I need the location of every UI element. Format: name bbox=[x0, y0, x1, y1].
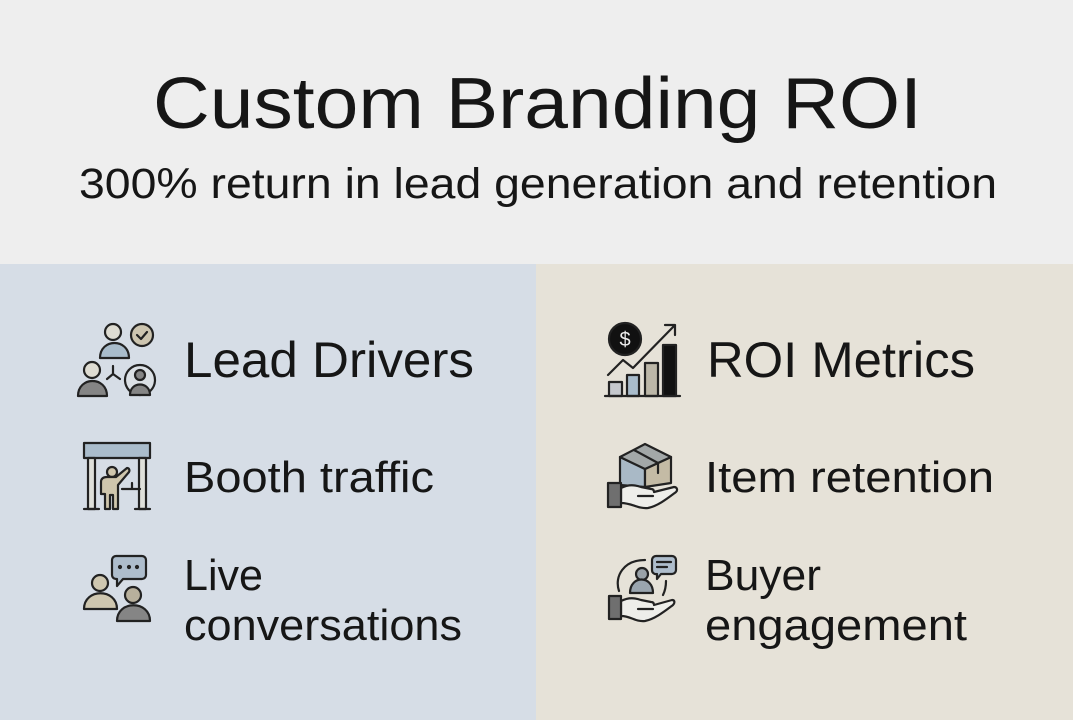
label: buyer engagement: Buyer bbox=[705, 551, 821, 600]
panel: lead drivers bbox=[0, 264, 536, 720]
label: buyer engagement: engagement bbox=[705, 601, 967, 650]
label: live conversations: Live bbox=[184, 551, 263, 600]
icon: live conversations bbox=[84, 556, 150, 621]
label: item retention: Item retention bbox=[705, 453, 994, 502]
panel: header bbox=[0, 0, 1073, 264]
icon: growth chart: $ bbox=[619, 329, 631, 351]
subtitle: 300% return in lead generation and retention bbox=[79, 160, 997, 208]
icon: hand holding box bbox=[608, 444, 677, 508]
title: Custom Branding ROI bbox=[153, 64, 922, 144]
icon: hand with buyer bbox=[609, 556, 676, 621]
icon: growth chart bbox=[605, 323, 680, 396]
panel: roi metrics bbox=[536, 264, 1073, 720]
label: booth traffic: Booth traffic bbox=[184, 453, 434, 502]
heading: roi metrics: ROI Metrics bbox=[707, 332, 975, 388]
label: live conversations: conversations bbox=[184, 601, 462, 650]
heading: lead drivers: Lead Drivers bbox=[184, 332, 474, 388]
icon: lead network bbox=[78, 324, 155, 396]
icon: booth bbox=[84, 443, 150, 509]
